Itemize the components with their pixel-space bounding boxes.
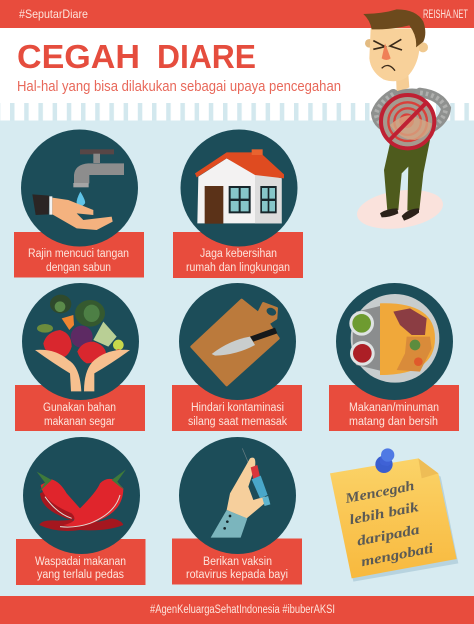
subtitle: Hal-hal yang bisa dilakukan sebagai upaya pencegahan — [17, 78, 341, 95]
note text: Mencegah — [343, 479, 416, 507]
icon: plate of food — [349, 294, 439, 383]
note text: mengobati — [360, 541, 435, 570]
icon: house — [195, 149, 284, 224]
caption — [28, 248, 129, 274]
panel: wash hands — [14, 130, 144, 278]
caption: Rajin mencuci tangan — [28, 248, 129, 260]
caption — [186, 556, 288, 581]
caption — [349, 402, 439, 428]
caption — [188, 402, 287, 428]
caption — [43, 402, 116, 428]
title: DIARE — [157, 39, 256, 76]
icon: push pin — [375, 448, 394, 473]
icon: hand holding syringe — [211, 448, 270, 538]
panel: fresh food — [15, 283, 145, 431]
caption: Waspadai makanan — [35, 556, 126, 568]
caption: dengan sabun — [46, 262, 111, 274]
caption: silang saat memasak — [188, 416, 287, 428]
illustration: man with stomach ache — [354, 9, 446, 234]
panel: cooked and clean food — [329, 283, 459, 431]
sticky note callout — [330, 448, 458, 582]
panel: rotavirus vaccine — [172, 437, 302, 584]
caption: Hindari kontaminasi — [191, 402, 284, 414]
caption: rumah dan lingkungan — [186, 262, 290, 274]
top banner: #SeputarDiare — [19, 7, 88, 21]
footer banner: #AgenKeluargaSehatIndonesia #ibuberAKSI — [150, 604, 335, 616]
caption: matang dan bersih — [349, 416, 438, 428]
caption — [186, 248, 290, 274]
caption: rotavirus kepada bayi — [186, 569, 288, 581]
caption: Berikan vaksin — [203, 556, 272, 568]
icon: hands holding vegetables — [35, 295, 130, 391]
caption: yang terlalu pedas — [37, 569, 124, 581]
caption — [35, 556, 126, 581]
icon: prohibition sign over stomach — [381, 95, 434, 148]
panel: spicy food — [16, 437, 146, 585]
icon: chili peppers — [37, 469, 126, 531]
note text: lebih baik — [348, 500, 420, 528]
caption: makanan segar — [44, 416, 115, 428]
title: CEGAH — [17, 39, 140, 76]
caption: Gunakan bahan — [43, 402, 116, 414]
caption: Makanan/minuman — [349, 402, 439, 414]
caption: Jaga kebersihan — [200, 248, 277, 260]
note text: daripada — [356, 523, 421, 550]
panel: cross contamination — [172, 283, 302, 431]
footer banner — [0, 596, 474, 624]
top banner — [0, 0, 474, 28]
panel: clean house — [173, 130, 303, 278]
note text — [343, 478, 435, 571]
icon: cutting board and knife — [192, 300, 278, 385]
icon: faucet and hand — [32, 149, 124, 230]
